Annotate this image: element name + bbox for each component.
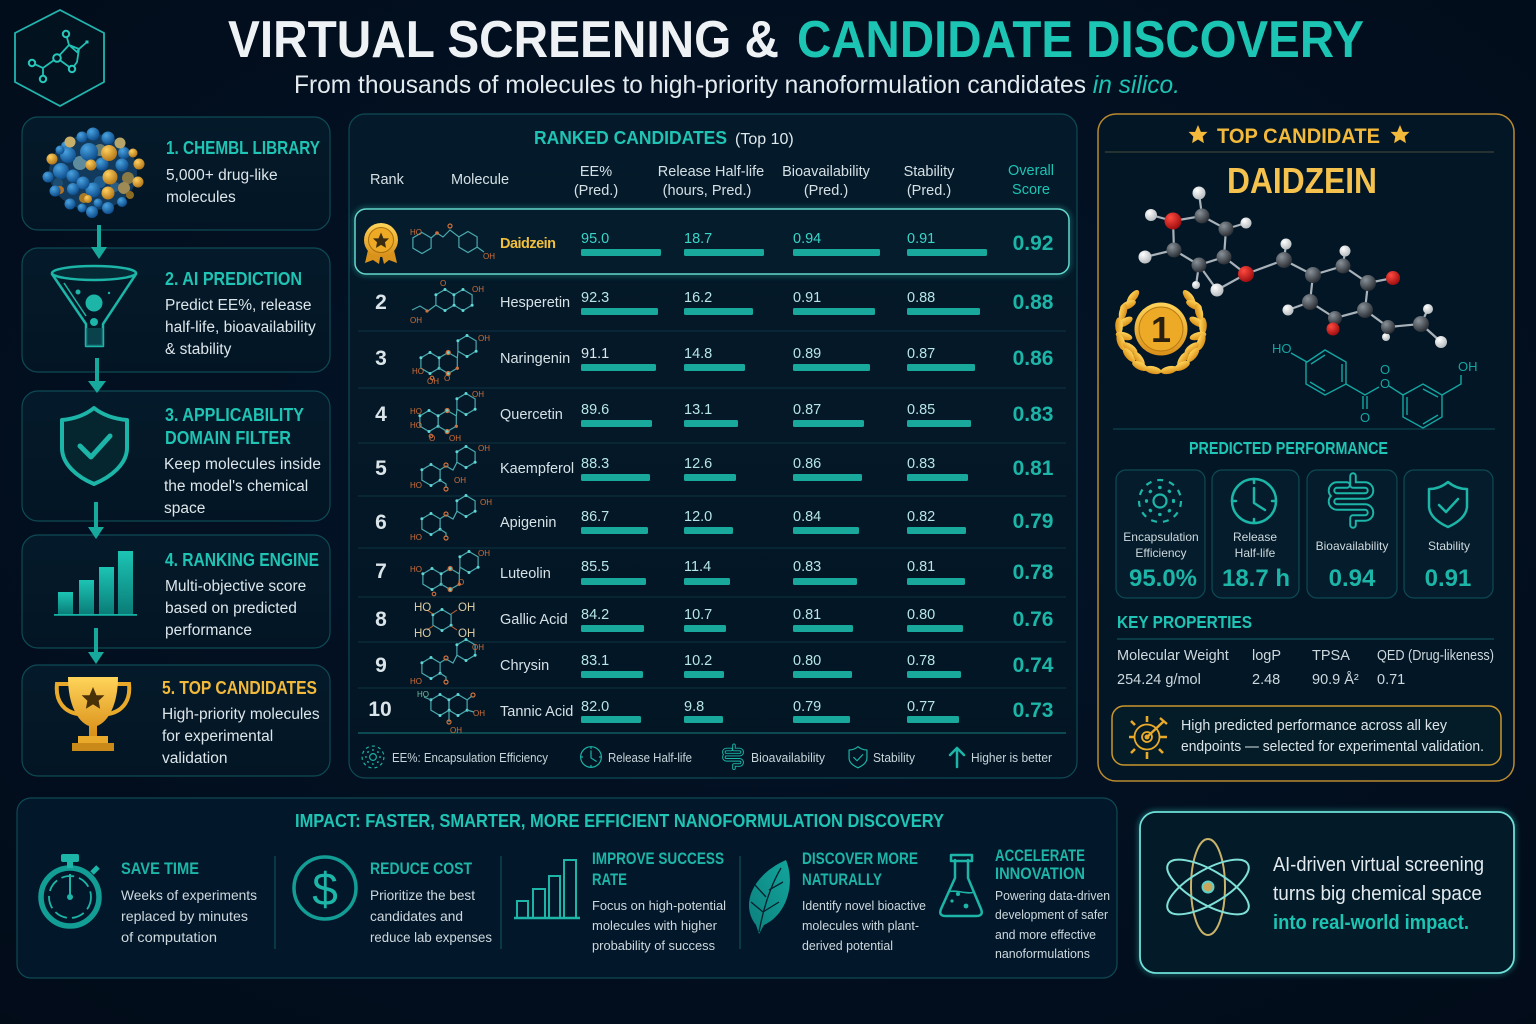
row 8: Gallic Acid: OH <box>458 602 475 614</box>
row 10: Tannic Acid: 0.79 <box>793 699 821 715</box>
row 10: Tannic Acid: 9.8 <box>684 699 704 715</box>
item: discover more naturally: NATURALLY <box>802 871 882 889</box>
text: closing statement: AI-driven virtual screening <box>1273 854 1484 876</box>
row 5: Kaempferol: 0.86 <box>793 456 821 472</box>
row 2: Hesperetin: OH <box>410 316 422 325</box>
row 9: Chrysin <box>375 638 1054 686</box>
row 2: Hesperetin: 0.91 <box>793 290 821 306</box>
row 5: Kaempferol: 0.81 <box>1013 457 1054 480</box>
row 9: Chrysin: OH <box>472 643 484 652</box>
row 5: Kaempferol: 88.3 <box>581 456 609 472</box>
title: CANDIDATE DISCOVERY <box>797 11 1364 69</box>
icon: stopwatch <box>41 854 99 926</box>
row 4: Quercetin: OH <box>449 434 461 443</box>
row 2: Hesperetin <box>375 279 1054 325</box>
heading: step 2: 2. AI PREDICTION <box>165 269 302 289</box>
row 6: Apigenin: HO <box>410 533 422 542</box>
table header: EE% <box>580 164 612 180</box>
row 10: Tannic Acid: OH <box>473 709 485 718</box>
row 1: Daidzein highlighted: 18.7 <box>684 231 712 247</box>
text: step 1 description: 5,000+ drug-like <box>166 167 278 184</box>
item: improve success rate: IMPROVE SUCCESS <box>592 850 724 868</box>
row 1: Daidzein highlighted: 0.92 <box>1013 232 1053 255</box>
row 6: Apigenin: 0.84 <box>793 509 821 525</box>
row 10: Tannic Acid: Tannic Acid <box>500 704 573 720</box>
item: reduce cost: Prioritize the best <box>370 887 475 903</box>
item: discover more naturally <box>749 850 926 953</box>
row 4: Quercetin: HO <box>410 421 422 430</box>
heading: ranked candidates: RANKED CANDIDATES <box>534 128 727 148</box>
item: discover more naturally: Identify novel bioactive <box>802 898 926 913</box>
arrow: step 3 to 4 <box>88 502 104 539</box>
item: discover more naturally: DISCOVER MORE <box>802 850 918 868</box>
text: step 5 description: validation <box>162 750 228 767</box>
2D structure diagram <box>1272 341 1478 428</box>
item: accelerate innovation: ACCELERATE <box>995 847 1085 865</box>
row 8: Gallic Acid: 84.2 <box>581 607 609 623</box>
row 10: Tannic Acid: HO <box>417 690 429 699</box>
icon: molecule cluster <box>42 128 144 218</box>
2D structure diagram: O <box>1380 362 1390 377</box>
2D structure diagram: O <box>1360 410 1370 425</box>
arrow: step 2 to 3 <box>88 358 106 393</box>
key properties values <box>1117 648 1494 688</box>
arrow: step 1 to 2 <box>91 225 107 259</box>
text: step 2 description: Predict EE%, release <box>165 297 311 314</box>
row 10: Tannic Acid: 10 <box>368 698 392 721</box>
panel: impact <box>17 798 1117 978</box>
row 7: Luteolin: HO <box>410 565 422 574</box>
table header: Bioavailability <box>782 164 871 180</box>
key properties values: Molecular Weight <box>1117 648 1229 664</box>
item: save time: of computation <box>121 929 217 945</box>
row 4: Quercetin: 4 <box>375 403 387 426</box>
row 10: Tannic Acid: 0.77 <box>907 699 935 715</box>
row 4: Quercetin: O <box>429 434 435 443</box>
item: accelerate innovation: Powering data-driven <box>995 888 1110 903</box>
3D ball-and-stick molecule <box>1138 186 1447 348</box>
icon: leaf <box>749 860 790 934</box>
molecule sketch: OH <box>483 252 495 261</box>
legend: Stability <box>873 751 916 765</box>
row 7: Luteolin: 7 <box>375 560 387 583</box>
icon: dollar coin <box>294 857 356 919</box>
metric card: encapsulation efficiency <box>1116 470 1205 598</box>
item: save time: replaced by minutes <box>121 908 248 924</box>
row 9: Chrysin: 0.74 <box>1013 654 1054 677</box>
row 5: Kaempferol: Kaempferol <box>500 461 574 477</box>
metric card: stability: 0.91 <box>1425 565 1471 592</box>
row 4: Quercetin: 89.6 <box>581 402 609 418</box>
metric card: bioavailability <box>1307 470 1397 598</box>
text: closing statement line 2: turns big chemical space <box>1273 883 1482 905</box>
row 3: Naringenin <box>375 334 1053 386</box>
metric card: release half-life: 18.7 h <box>1222 565 1290 592</box>
key properties values: 254.24 g/mol <box>1117 672 1201 688</box>
text: step 4 description: based on predicted <box>165 600 297 617</box>
row 4: Quercetin: OH <box>472 390 484 399</box>
row 4: Quercetin: Quercetin <box>500 407 563 423</box>
row 7: Luteolin: 11.4 <box>684 559 711 575</box>
panel: pipeline step 5 top candidates <box>22 665 330 776</box>
table header: Overall <box>1008 163 1054 179</box>
table header: Score <box>1012 182 1050 198</box>
metric card: release half-life: Half-life <box>1235 546 1276 560</box>
callout: AI-driven virtual screening <box>1140 812 1514 973</box>
row 8: Gallic Acid: 8 <box>375 608 387 631</box>
text: step 5 description: for experimental <box>162 728 273 745</box>
row 1: Daidzein highlighted: 0.91 <box>907 231 935 247</box>
item: save time <box>41 854 257 945</box>
table header: Rank <box>370 172 405 188</box>
row 7: Luteolin: OH <box>478 549 490 558</box>
row 7: Luteolin: 0.83 <box>793 559 821 575</box>
row 2: Hesperetin: 16.2 <box>684 290 712 306</box>
molecule sketch: HO <box>410 228 422 237</box>
row 7: Luteolin: Luteolin <box>500 566 551 582</box>
metric card: stability: Stability <box>1428 539 1470 553</box>
panel: pipeline step 2 AI prediction <box>22 248 330 372</box>
item: reduce cost <box>294 857 492 945</box>
text: step 1 description: molecules <box>166 189 236 206</box>
row 3: Naringenin: O <box>444 374 450 383</box>
row 3: Naringenin: 91.1 <box>581 346 609 362</box>
icon: bar chart outline <box>514 860 580 918</box>
item: reduce cost: candidates and <box>370 908 463 924</box>
row 6: Apigenin: 86.7 <box>581 509 609 525</box>
text: callout message second line: endpoints — selected for experimental validation. <box>1181 739 1484 755</box>
heading: step 1: 1. CHEMBL LIBRARY <box>166 138 320 158</box>
row 2: Hesperetin: OH <box>472 285 484 294</box>
icon: rank 1 gold medal with laurel <box>1115 288 1207 375</box>
row 4: Quercetin: 0.83 <box>1013 403 1053 426</box>
heading: step 3: 3. APPLICABILITY <box>165 405 304 425</box>
key properties values: 0.71 <box>1377 672 1405 688</box>
table header: (hours, Pred.) <box>663 183 751 199</box>
heading: predicted performance: PREDICTED PERFORMANCE <box>1189 438 1388 458</box>
metric card: encapsulation efficiency: Encapsulation <box>1123 530 1199 544</box>
item: improve success rate: RATE <box>592 871 627 889</box>
text: step 3 description: space <box>164 500 205 517</box>
row 6: Apigenin: 0.82 <box>907 509 935 525</box>
item: improve success rate: molecules with higher <box>592 918 718 933</box>
panel: ranked candidates table <box>349 114 1077 778</box>
row 6: Apigenin: Apigenin <box>500 515 556 531</box>
item: improve success rate: Focus on high-potential <box>592 898 726 913</box>
row 9: Chrysin: 9 <box>375 654 387 677</box>
row 2: Hesperetin: 0.88 <box>1013 291 1054 314</box>
item: save time: Weeks of experiments <box>121 887 257 903</box>
row 8: Gallic Acid: 0.80 <box>907 607 935 623</box>
row 3: Naringenin: 0.87 <box>907 346 935 362</box>
row 5: Kaempferol: OH <box>454 476 466 485</box>
row 1: Daidzein highlighted: Daidzein <box>500 236 556 252</box>
row 1: Daidzein highlighted: 95.0 <box>581 231 609 247</box>
row 9: Chrysin: 83.1 <box>581 653 609 669</box>
row 2: Hesperetin: 92.3 <box>581 290 609 306</box>
table header: (Pred.) <box>907 183 951 199</box>
row 5: Kaempferol: OH <box>478 444 490 453</box>
molecule sketch <box>410 224 495 261</box>
row 1: Daidzein highlighted: 0.94 <box>793 231 821 247</box>
text: step 3 description: the model's chemical <box>164 478 308 495</box>
metric card: stability <box>1404 470 1493 598</box>
row 6: Apigenin <box>375 494 1053 542</box>
item: accelerate innovation: INNOVATION <box>995 865 1085 883</box>
row 7: Luteolin <box>375 549 1054 596</box>
row 5: Kaempferol: 0.83 <box>907 456 935 472</box>
heading: impact: IMPACT: FASTER, SMARTER, MORE EFFICIENT NANOFORMULATION DISCOVERY <box>295 811 944 831</box>
heading: step 4: 4. RANKING ENGINE <box>165 550 319 570</box>
item: accelerate innovation: and more effective <box>995 927 1096 942</box>
text: step 4 description: Multi-objective score <box>165 578 306 595</box>
row 7: Luteolin: 0.81 <box>907 559 935 575</box>
arrow: step 4 to 5 <box>88 628 104 664</box>
legend: Bioavailability <box>751 751 826 765</box>
item: discover more naturally: derived potential <box>802 938 893 953</box>
icon: dollar coin: $ <box>312 863 338 915</box>
row 5: Kaempferol <box>375 444 1054 491</box>
text: step 2 description: & stability <box>165 341 232 358</box>
icon: target with dart <box>1129 716 1167 759</box>
text: callout message: High predicted performance across all key <box>1181 718 1448 734</box>
2D structure diagram: OH <box>1458 359 1478 374</box>
row 10: Tannic Acid: 0.73 <box>1013 699 1053 722</box>
row 5: Kaempferol: 5 <box>375 457 387 480</box>
text: step 3 description: Keep molecules inside <box>164 456 321 473</box>
row 8: Gallic Acid: HO <box>414 628 431 640</box>
legend: EE%: Encapsulation Efficiency <box>392 751 549 765</box>
row 8: Gallic Acid: 10.7 <box>684 607 712 623</box>
key properties values: logP <box>1252 648 1281 664</box>
row 3: Naringenin: HO <box>412 367 424 376</box>
row 8: Gallic Acid <box>375 602 1053 640</box>
row 8: Gallic Acid: OH <box>458 628 475 640</box>
row 10: Tannic Acid: 82.0 <box>581 699 609 715</box>
text: step 4 description: performance <box>165 622 252 639</box>
row 10: Tannic Acid <box>368 690 1053 735</box>
subtitle: From thousands of molecules to high-priority nanoformulation candidates in silico. <box>294 71 1180 99</box>
table header: Stability <box>904 164 955 180</box>
table header: Release Half-life <box>658 164 764 180</box>
table header: Molecule <box>451 172 509 188</box>
icon: shield check <box>62 408 127 484</box>
icon: bars <box>54 551 137 616</box>
text: closing statement highlight: into real-world impact. <box>1273 912 1469 934</box>
row 3: Naringenin: OH <box>478 334 490 343</box>
icon: trophy <box>57 677 129 751</box>
key properties values: QED (Drug-likeness) <box>1377 648 1494 664</box>
legend: Higher is better <box>971 751 1052 765</box>
row 5: Kaempferol: HO <box>410 481 422 490</box>
metric card: release half-life <box>1212 470 1299 598</box>
table header: (Pred.) <box>574 183 618 199</box>
panel: pipeline step 1 ChEMBL library <box>22 117 330 230</box>
row 3: Naringenin: Naringenin <box>500 351 570 367</box>
panel: pipeline step 4 ranking engine <box>22 535 330 648</box>
metric card: encapsulation efficiency: Efficiency <box>1135 546 1187 560</box>
panel: top candidate <box>1098 114 1514 781</box>
table header <box>370 163 1054 199</box>
heading: top candidate: TOP CANDIDATE <box>1217 125 1380 148</box>
row 4: Quercetin: 0.85 <box>907 402 935 418</box>
row 3: Naringenin: 0.89 <box>793 346 821 362</box>
row 2: Hesperetin: Hesperetin <box>500 295 570 311</box>
item: accelerate innovation: nanoformulations <box>995 946 1090 961</box>
callout: high predicted performance <box>1112 706 1501 765</box>
legend: Release Half-life <box>608 751 692 765</box>
item: accelerate innovation: development of safer <box>995 907 1109 922</box>
row 2: Hesperetin: 2 <box>375 291 387 314</box>
row 8: Gallic Acid: 0.76 <box>1013 608 1053 631</box>
title <box>228 11 1364 69</box>
legend <box>362 745 1052 768</box>
row 9: Chrysin: 10.2 <box>684 653 712 669</box>
row 2: Hesperetin: 0.88 <box>907 290 935 306</box>
row 9: Chrysin: 0.78 <box>907 653 935 669</box>
metric card: encapsulation efficiency: 95.0% <box>1129 565 1197 592</box>
row 8: Gallic Acid: 0.81 <box>793 607 821 623</box>
row 2: Hesperetin: O <box>440 279 446 288</box>
row 3: Naringenin: 0.86 <box>1013 347 1053 370</box>
row 4: Quercetin: HO <box>410 407 422 416</box>
key properties values: TPSA <box>1312 648 1350 664</box>
row 4: Quercetin: 13.1 <box>684 402 712 418</box>
item: improve success rate: probability of success <box>592 938 715 953</box>
metric card: release half-life: Release <box>1233 530 1277 544</box>
row 8: Gallic Acid: Gallic Acid <box>500 612 568 628</box>
icon: rank 1 gold medal with laurel: 1 <box>1151 309 1171 350</box>
heading: key properties: KEY PROPERTIES <box>1117 612 1252 632</box>
item: accelerate innovation <box>940 847 1110 961</box>
icon: funnel <box>52 266 136 346</box>
metric card: bioavailability: 0.94 <box>1329 565 1376 592</box>
item: discover more naturally: molecules with plant- <box>802 918 919 933</box>
2D structure diagram: HO <box>1272 341 1292 356</box>
row 7: Luteolin: O <box>458 578 464 587</box>
text: step 5 description: High-priority molecules <box>162 706 320 723</box>
row 3: Naringenin: 14.8 <box>684 346 712 362</box>
row 4: Quercetin <box>375 390 1053 443</box>
row 6: Apigenin: OH <box>480 498 492 507</box>
item: save time: SAVE TIME <box>121 860 199 878</box>
icon: molecule hexagon logo <box>15 10 104 106</box>
row 6: Apigenin: 0.79 <box>1013 510 1053 533</box>
title: VIRTUAL SCREENING & <box>228 11 779 69</box>
table header: (Pred.) <box>804 183 848 199</box>
heading: top 10 note: (Top 10) <box>735 131 794 148</box>
row 5: Kaempferol: 12.6 <box>684 456 712 472</box>
key properties values: 2.48 <box>1252 672 1280 688</box>
key properties values: 90.9 Å² <box>1312 671 1359 688</box>
2D structure diagram: O <box>1380 376 1390 391</box>
row 7: Luteolin: 0.78 <box>1013 561 1054 584</box>
icon: atom <box>1160 839 1256 935</box>
text: step 2 description: half-life, bioavailability <box>165 319 316 336</box>
icon: gold rank medal <box>364 223 398 264</box>
row 9: Chrysin: Chrysin <box>500 658 549 674</box>
row 4: Quercetin: 0.87 <box>793 402 821 418</box>
row 9: Chrysin: 0.80 <box>793 653 821 669</box>
heading: step 3 line 2: DOMAIN FILTER <box>165 428 291 448</box>
item: improve success rate <box>514 850 726 953</box>
row 6: Apigenin: 12.0 <box>684 509 712 525</box>
row 9: Chrysin: HO <box>410 677 422 686</box>
heading: step 5: 5. TOP CANDIDATES <box>162 678 317 698</box>
icon: flask <box>940 855 982 916</box>
row 1: Daidzein highlighted <box>355 209 1069 274</box>
row 6: Apigenin: 6 <box>375 511 387 534</box>
row 8: Gallic Acid: HO <box>414 602 431 614</box>
metric card: bioavailability: Bioavailability <box>1316 539 1388 553</box>
item: reduce cost: REDUCE COST <box>370 860 472 878</box>
row 3: Naringenin: 3 <box>375 347 387 370</box>
item: reduce cost: reduce lab expenses <box>370 929 492 945</box>
row 3: Naringenin: OH <box>427 377 439 386</box>
row 7: Luteolin: 85.5 <box>581 559 609 575</box>
row 10: Tannic Acid: OH <box>450 726 462 735</box>
heading: Daidzein: DAIDZEIN <box>1227 160 1377 201</box>
panel: pipeline step 3 applicability domain filter <box>22 391 330 521</box>
